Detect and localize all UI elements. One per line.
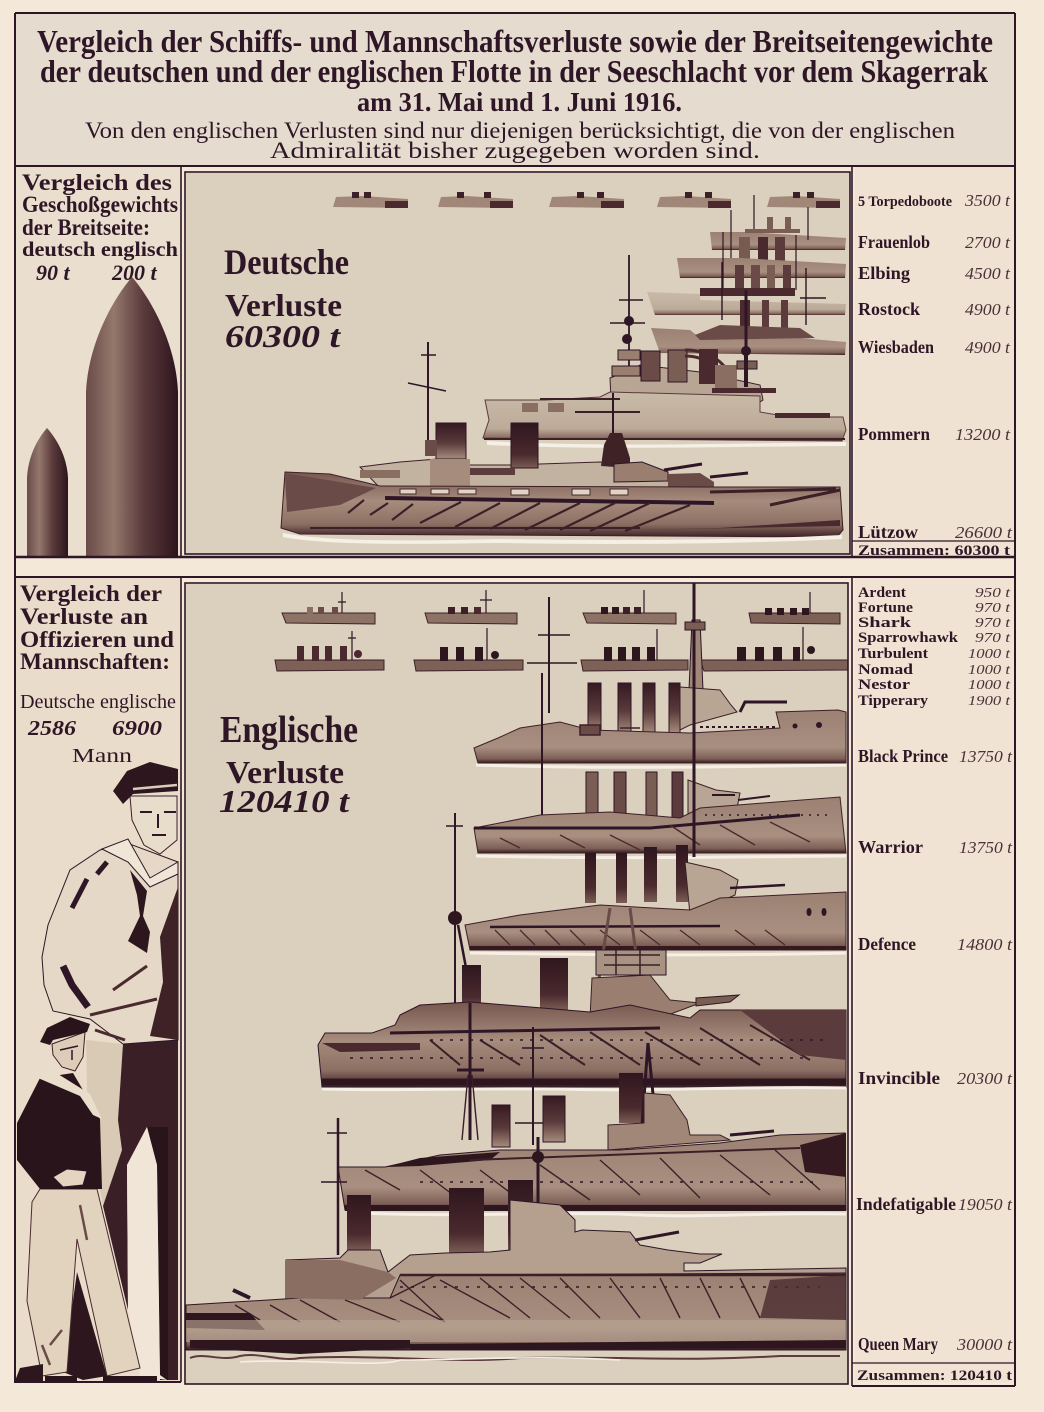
ship list: English losses: Nomad [858, 662, 914, 678]
ship list: English losses: Nestor [858, 677, 910, 693]
heading: shell weight comparison: Vergleich des [22, 170, 172, 195]
ship list: English losses: Indefatigable [856, 1194, 956, 1214]
illustration: short German sailor [15, 1017, 157, 1382]
ship: Defence [465, 583, 846, 955]
ship list: English losses: Zusammen: 120410 t [857, 1368, 1012, 1384]
heading: shell weight comparison: deutsch englisch [22, 237, 178, 261]
heading: German losses: 60300 t [225, 318, 341, 354]
ship list: English losses: 1000 t [968, 678, 1011, 693]
ship list: English losses: Black Prince [858, 746, 948, 766]
ship list: German losses: Pommern [858, 424, 930, 444]
heading: crew loss comparison: Vergleich der [20, 581, 162, 606]
heading: crew loss comparison: Mann [72, 745, 132, 767]
heading: crew loss comparison: Verluste an [20, 604, 148, 629]
panel: upper right column [855, 166, 1014, 557]
illustration: tall English sailor [42, 762, 178, 1380]
ship list: German losses: 26600 t [955, 523, 1013, 542]
heading: shell weight comparison: Geschoßgewichts [22, 192, 178, 217]
heading: shell weight comparison: der Breitseite: [22, 215, 150, 240]
heading: crew loss comparison: Mannschaften: [20, 649, 170, 674]
ship list: English losses: Queen Mary [858, 1334, 938, 1354]
ship list: English losses: 13750 t [959, 838, 1013, 857]
ship list: English losses: Shark [858, 615, 912, 631]
ship: Frauenlob [710, 195, 846, 261]
panel: upper left column [16, 166, 181, 557]
ship list: German losses [858, 191, 1013, 559]
ship list: German losses: Wiesbaden [858, 337, 934, 357]
panel: lower right column [855, 578, 1014, 1382]
ship list: English losses: Ardent [858, 585, 906, 601]
ship: Invincible [318, 813, 846, 1090]
ship list: English losses: Invincible [858, 1068, 940, 1088]
heading: English losses [219, 709, 358, 819]
heading: crew loss comparison: Offizieren und [20, 627, 174, 652]
ship list: German losses: Elbing [858, 263, 910, 283]
heading: German losses [224, 242, 349, 354]
ship list: German losses: 5 Torpedoboote [858, 194, 952, 210]
ship list: German losses: Frauenlob [858, 232, 930, 252]
ship: Black Prince [474, 597, 846, 767]
heading: shell weight comparison: 200 t [111, 260, 158, 285]
ship: Queen Mary [186, 1118, 846, 1363]
ship list: English losses: 970 t [975, 616, 1011, 631]
heading: shell weight comparison: 90 t [36, 260, 70, 285]
ship list: English losses: 1900 t [968, 694, 1011, 709]
English destroyers [275, 590, 848, 671]
ship list: German losses: 2700 t [965, 233, 1011, 252]
ship list: English losses: 970 t [975, 601, 1011, 616]
subtitle note [85, 118, 956, 163]
ship: Indefatigable [338, 1003, 846, 1216]
ship list: English losses: 30000 t [956, 1335, 1013, 1354]
heading: crew loss comparison [20, 581, 176, 767]
ship list: English losses: 19050 t [958, 1195, 1013, 1214]
ship list: German losses: Zusammen: 60300 t [858, 543, 1010, 559]
ship list: English losses: Warrior [858, 837, 923, 857]
ship list: German losses: 3500 t [964, 191, 1011, 210]
ship list: German losses: Lützow [858, 522, 918, 542]
heading: German losses: Verluste [225, 287, 342, 323]
ship list: English losses: 1000 t [968, 647, 1011, 662]
ship list: English losses: Turbulent [858, 646, 928, 662]
ship list: German losses: Rostock [858, 299, 920, 319]
ship list: German losses: 13200 t [955, 425, 1011, 444]
heading: shell weight comparison [22, 170, 178, 285]
ship list: English losses [856, 585, 1013, 1384]
ship list: English losses: 950 t [975, 586, 1011, 601]
panel: English ships background [186, 584, 848, 1384]
ship list: English losses: Sparrowhawk [858, 630, 959, 646]
heading: English losses: Englische [220, 709, 358, 751]
heading: German losses: Deutsche [224, 242, 349, 282]
ship list: English losses: Fortune [858, 600, 913, 616]
ship list: English losses: 20300 t [957, 1069, 1013, 1088]
heading: crew loss comparison: 2586 [27, 716, 77, 740]
ship list: German losses: 4900 t [965, 338, 1011, 357]
subtitle note: Von den englischen Verlusten sind nur diejenigen berücksichtigt, die von der englischen [85, 118, 956, 143]
title [37, 23, 993, 117]
icon: small German shell [27, 428, 68, 556]
ship: Wiesbaden [651, 290, 846, 355]
ship list: German losses: 4900 t [965, 300, 1011, 319]
panel: lower left column [16, 578, 181, 1382]
panel: German ships background [186, 173, 850, 554]
heading: English losses: Verluste [226, 754, 344, 790]
icon: large English shell [86, 277, 178, 556]
ship list: English losses: 14800 t [957, 935, 1013, 954]
ship list: English losses: Tipperary [858, 693, 929, 709]
ship: Elbing [677, 232, 846, 293]
ship list: English losses: Defence [858, 934, 916, 954]
ship: Pommern [483, 255, 846, 448]
subtitle note: Admiralität bisher zugegeben worden sind. [270, 138, 760, 163]
title: am 31. Mai und 1. Juni 1916. [357, 87, 682, 117]
heading: English losses: 120410 t [219, 783, 350, 819]
ship list: German losses: 4500 t [965, 264, 1011, 283]
ship: Rostock [647, 262, 846, 328]
ship: Warrior [474, 673, 846, 858]
ship: Lützow [281, 342, 843, 544]
title panel [15, 12, 1015, 166]
heading: crew loss comparison: Deutsche englische [20, 691, 176, 713]
German torpedo boats [333, 192, 840, 208]
heading: crew loss comparison: 6900 [112, 716, 163, 740]
ship list: English losses: 970 t [975, 631, 1011, 646]
ship list: English losses: 13750 t [959, 747, 1013, 766]
ship list: English losses: 1000 t [968, 663, 1011, 678]
